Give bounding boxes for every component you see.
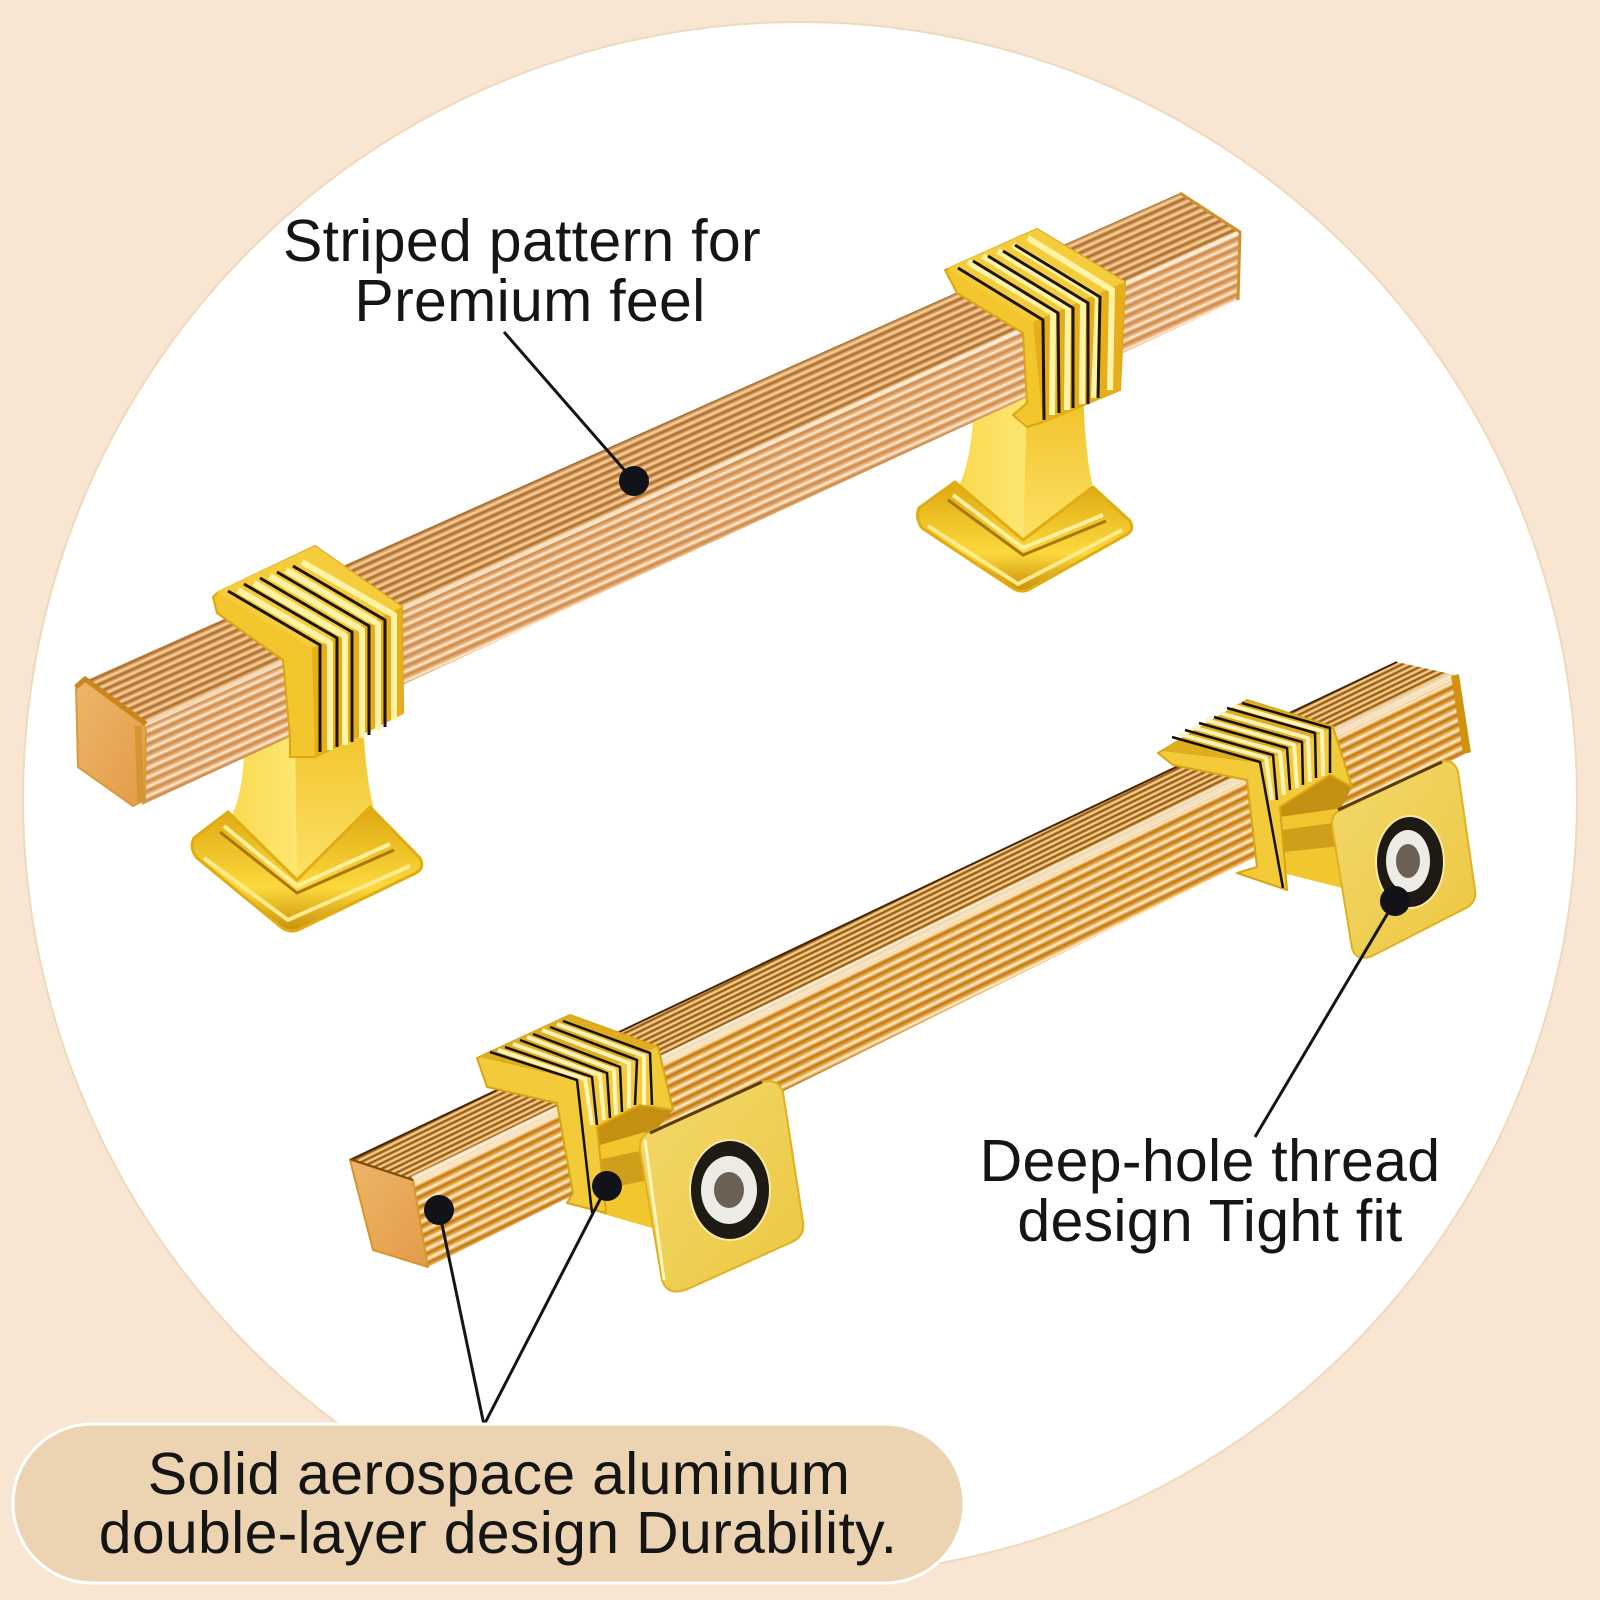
callout pill: solid aerospace aluminum: double-layer design Durability. xyxy=(99,1500,897,1566)
top handle right base xyxy=(918,482,1132,591)
top handle right leg xyxy=(953,380,1103,550)
top handle xyxy=(76,193,1240,931)
callout pill: solid aerospace aluminum: Solid aerospace aluminum xyxy=(148,1441,850,1507)
callout pill: solid aerospace aluminum xyxy=(13,1424,964,1583)
callout: deep-hole thread: design Tight fit xyxy=(1017,1188,1403,1254)
top handle left leg xyxy=(223,700,390,890)
callout: striped pattern: Premium feel xyxy=(354,268,706,334)
bottom handle left mounting plate xyxy=(640,1081,803,1292)
top handle right collar xyxy=(945,229,1125,427)
left screw hole xyxy=(689,1139,771,1241)
bottom handle right stem xyxy=(1280,775,1352,888)
callout: deep-hole thread: Deep-hole thread xyxy=(980,1128,1440,1194)
top handle left collar xyxy=(213,546,403,757)
callout: striped pattern xyxy=(283,208,761,496)
callout pointers: solid aluminum xyxy=(424,1171,622,1425)
bottom handle right collar xyxy=(1158,700,1352,890)
bottom handle left collar xyxy=(477,1015,673,1213)
callout: deep-hole thread xyxy=(980,886,1440,1254)
bottom handle left stem xyxy=(590,1103,673,1228)
top handle ribbed bar xyxy=(87,193,1240,805)
top handle near end cap xyxy=(76,679,146,806)
top handle left base xyxy=(192,807,422,931)
bottom handle ribbed bar xyxy=(350,662,1467,1267)
right screw hole xyxy=(1375,815,1445,909)
bottom handle right mounting plate xyxy=(1332,761,1475,958)
bottom handle near end cap xyxy=(350,1159,428,1267)
callout: striped pattern: Striped pattern for xyxy=(283,208,761,274)
bottom handle xyxy=(350,662,1475,1292)
